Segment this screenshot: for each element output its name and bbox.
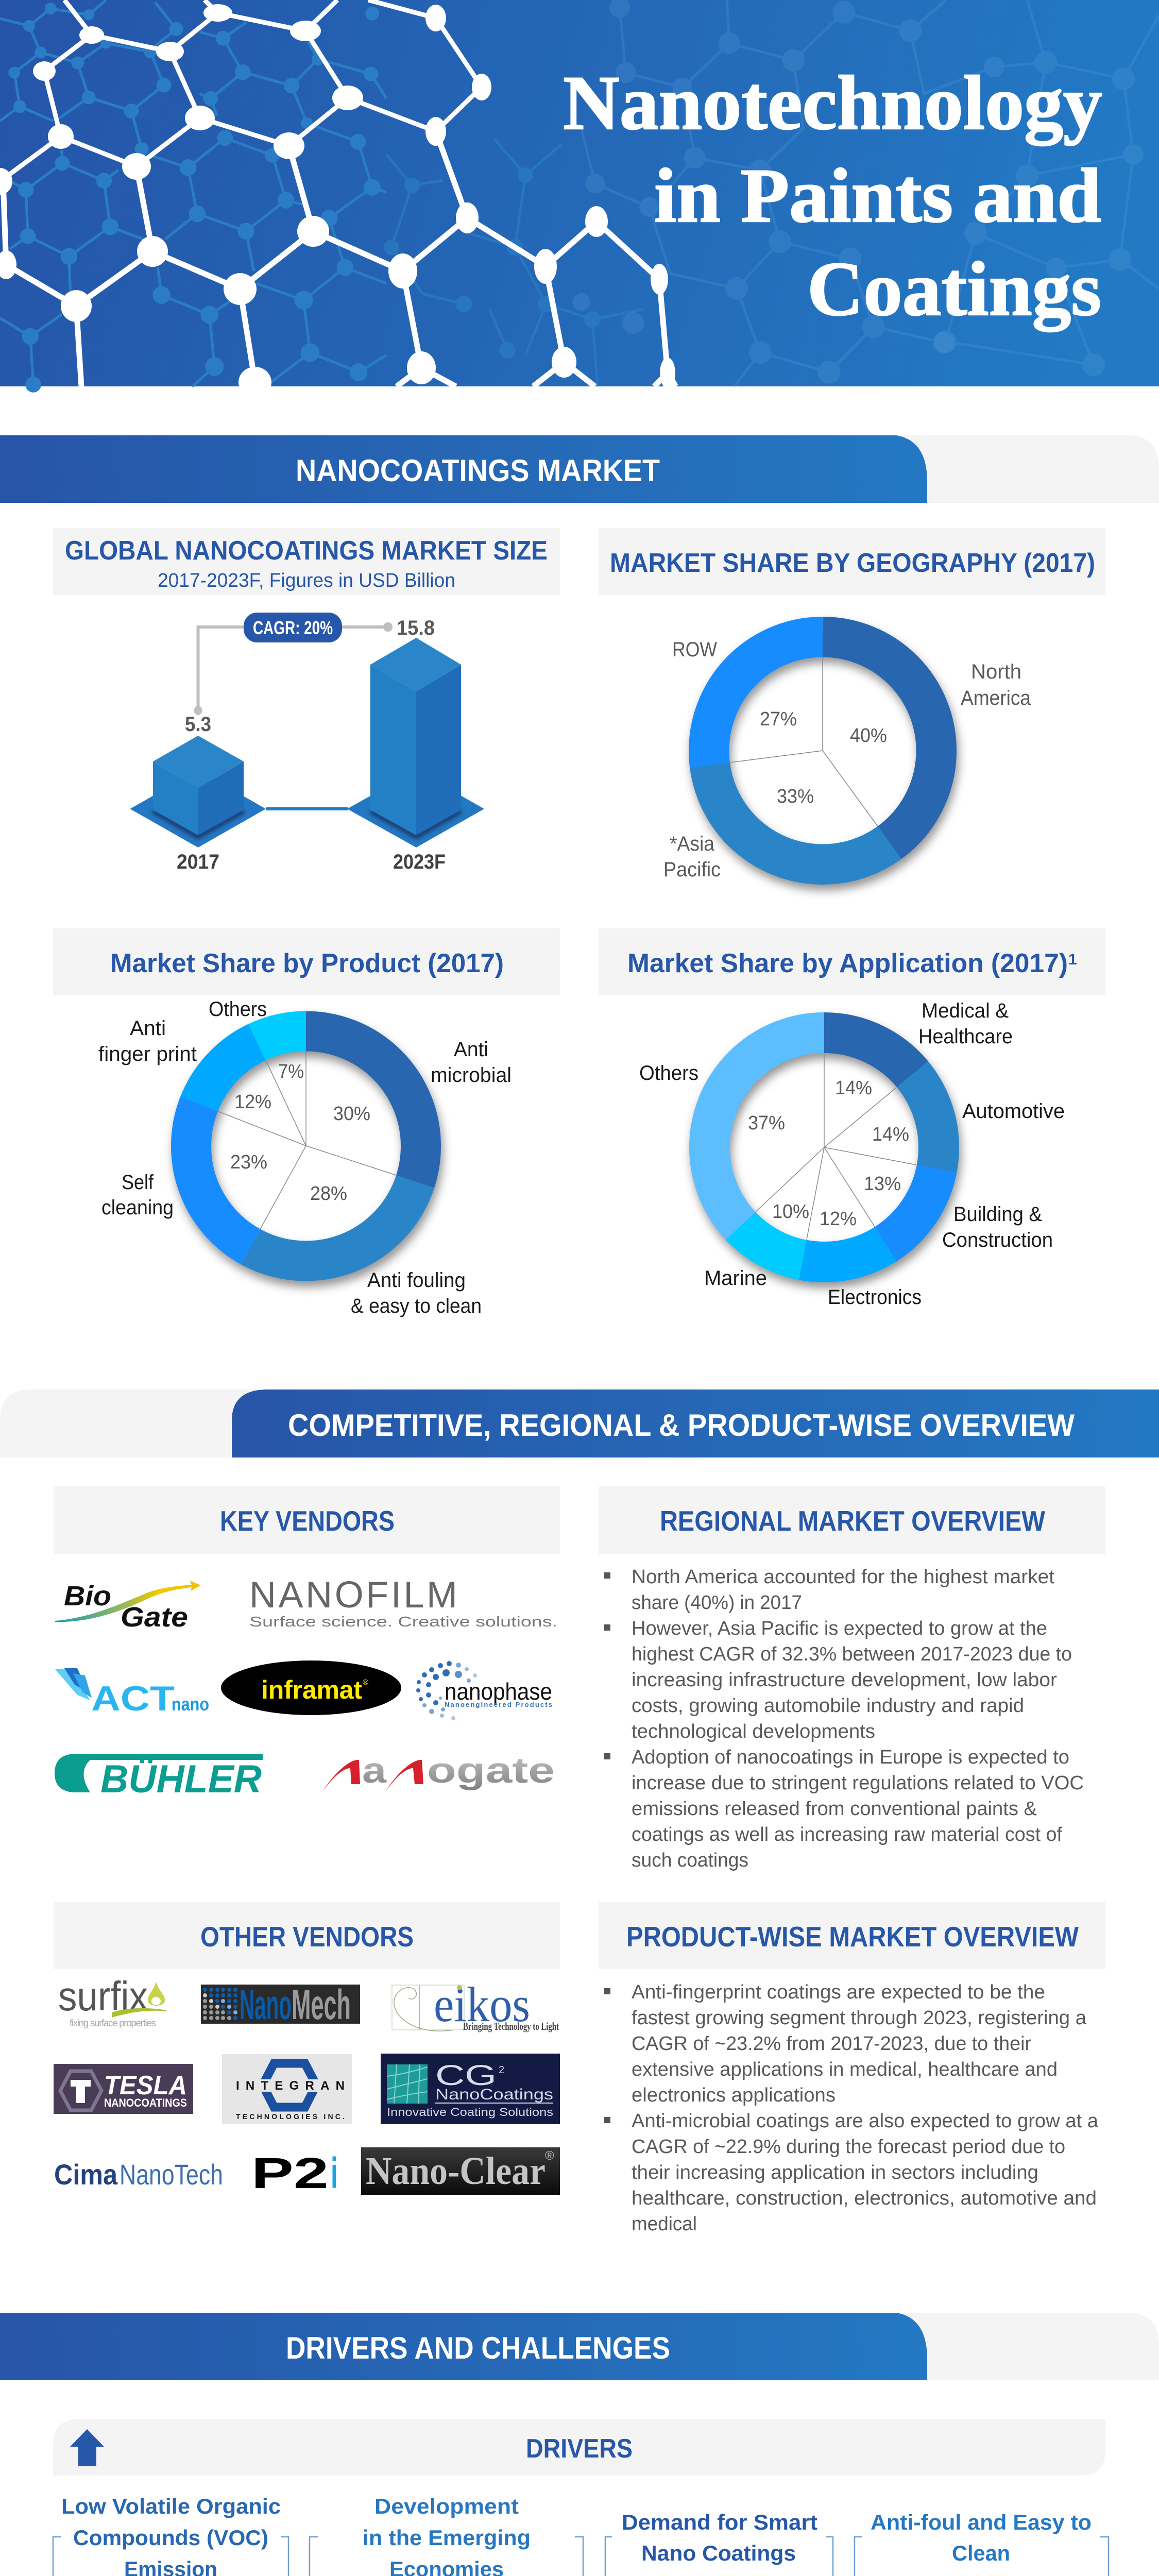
donut chart: product: & easy to clean — [351, 1295, 482, 1317]
logo: nanogate: a — [362, 1750, 387, 1790]
donut chart: application: Marine — [704, 1267, 767, 1290]
driver card: emerging economies — [310, 2494, 583, 2576]
title — [563, 60, 1102, 332]
driver card: smart nano coatings: Nano Coatings — [641, 2541, 796, 2565]
heading: product: Market Share by Product (2017) — [110, 948, 504, 978]
logo: inframat: ® — [363, 1678, 368, 1687]
donut chart: application: Healthcare — [918, 1025, 1013, 1048]
heading: regional: REGIONAL MARKET OVERVIEW — [660, 1505, 1045, 1537]
panel: market share by product — [53, 928, 560, 1317]
bullet list: product-wise: electronics applications — [632, 2084, 836, 2106]
bullet list: regional: highest CAGR of 32.3% between 2017-2023 due to — [632, 1643, 1072, 1665]
donut chart: product — [98, 998, 512, 1317]
panel: key vendors — [54, 1486, 560, 1801]
bar 2023F: 2023F — [393, 851, 446, 873]
logo: nanophase: Nanoengineered Products — [445, 1701, 552, 1708]
donut chart: product: 12% — [234, 1091, 271, 1113]
heading: product-wise: PRODUCT-WISE MARKET OVERVIEW — [626, 1921, 1079, 1953]
donut chart: geography: 27% — [760, 708, 797, 730]
heading: other vendors: OTHER VENDORS — [200, 1921, 414, 1953]
bullet list: product-wise: healthcare, construction, electronics, automotive and — [632, 2188, 1097, 2209]
logo: inframat — [221, 1660, 401, 1715]
panel: product-wise market overview — [599, 1902, 1105, 2235]
bullet list: regional: technological developments — [632, 1721, 875, 1742]
donut chart: product: Anti — [454, 1038, 488, 1061]
logo: Integran: INTEGRAN — [236, 2079, 345, 2093]
driver card: anti-foul and easy to clean: Anti-foul and Easy to — [871, 2510, 1092, 2534]
donut chart: geography: 40% — [850, 725, 887, 747]
driver card: VOC emission: Low Volatile Organic — [61, 2494, 281, 2518]
bullet list: product-wise — [604, 1981, 1099, 2235]
logo: Bio Gate: Gate — [121, 1602, 188, 1633]
header banner — [0, 0, 1159, 398]
logo: NanoMech — [201, 1981, 360, 2028]
bar 2017: 2017 — [177, 851, 219, 873]
heading: geography: MARKET SHARE BY GEOGRAPHY (2017) — [610, 548, 1095, 578]
drivers header: DRIVERS — [526, 2434, 633, 2464]
driver card: emerging economies: Development — [374, 2494, 519, 2518]
logo: Buhler: BÜHLER — [100, 1757, 262, 1801]
heading: geography — [599, 528, 1105, 595]
logo: Tesla Nanocoatings: NANOCOATINGS — [104, 2096, 187, 2109]
driver card: VOC emission: Compounds (VOC) — [73, 2526, 268, 2550]
donut chart: product: microbial — [431, 1064, 512, 1087]
logo: ACT nano: ACT — [91, 1679, 175, 1718]
bar 2023F: 15.8 — [397, 617, 435, 639]
donut chart: geography: North — [971, 660, 1021, 683]
bullet list: product-wise: CAGR of ~23.2% from 2017-2023, due to their — [632, 2033, 1031, 2055]
logo: P2i: i — [331, 2149, 338, 2197]
driver card: smart nano coatings: Demand for Smart — [622, 2510, 817, 2534]
driver card: anti-foul and easy to clean: Clean — [952, 2541, 1010, 2565]
heading: product-wise — [599, 1902, 1105, 1969]
donut chart: product: 23% — [230, 1151, 267, 1173]
bullet list: regional: Adoption of nanocoatings in Europe is expected to — [632, 1747, 1069, 1768]
donut chart: geography: America — [961, 687, 1031, 709]
icon: up arrow — [70, 2429, 104, 2466]
donut chart: application: Construction — [942, 1229, 1053, 1251]
logo: P2i: P2 — [251, 2149, 329, 2197]
logo: nanogate — [323, 1750, 555, 1791]
heading: market size: 2017-2023F, Figures in USD Billion — [158, 570, 455, 591]
donut chart: product: Self — [122, 1171, 154, 1194]
logo: Bio Gate: Bio — [64, 1581, 111, 1612]
donut chart: application: 13% — [864, 1173, 901, 1195]
donut chart: product: Others — [209, 998, 267, 1021]
donut chart: application: 14% — [872, 1124, 909, 1145]
bullet list: regional: emissions released from conventional paints & — [632, 1798, 1037, 1820]
panel: global nanocoatings market size — [53, 528, 560, 873]
logo: CG2 Nanocoatings: NanoCoatings — [435, 2086, 553, 2103]
logo: Nanofilm: Surface science. Creative solutions. — [249, 1614, 557, 1630]
logo: NanoMech: Nano — [240, 1981, 292, 2028]
donut chart: geography: 33% — [777, 786, 814, 807]
panel: market share by geography — [599, 528, 1105, 881]
bullet list: product-wise: CAGR of ~22.9% during the forecast period due to — [632, 2136, 1065, 2158]
bullet list: regional: increasing infrastructure development, low labor — [632, 1669, 1057, 1691]
donut chart: application: Building & — [953, 1203, 1042, 1226]
logo: Tesla Nanocoatings: TESLA — [104, 2071, 187, 2100]
title: in Paints and — [654, 153, 1101, 239]
bullet list: regional: costs, growing automobile industry and rapid — [632, 1695, 1024, 1717]
heading: application: Market Share by Application (2017) — [627, 948, 1068, 978]
logo: nanogate: ogate — [427, 1750, 555, 1790]
heading: key vendors — [54, 1486, 560, 1554]
donut chart: application: 12% — [820, 1208, 857, 1230]
bullet list: regional: increase due to stringent regulations related to VOC — [632, 1772, 1084, 1794]
logo: Integran — [222, 2054, 352, 2124]
section bar: nanocoatings market — [0, 435, 1159, 503]
CAGR connector — [194, 613, 393, 715]
donut chart: product: finger print — [98, 1043, 197, 1065]
logo: ACT nano: nano — [172, 1693, 209, 1715]
donut chart: geography: Pacific — [663, 858, 721, 881]
logo: Tesla Nanocoatings — [54, 2064, 193, 2114]
bullet list: regional: However, Asia Pacific is expected to grow at the — [632, 1618, 1047, 1639]
logo: Cima NanoTech — [54, 2158, 223, 2191]
logo: eikos: eikos — [434, 1977, 530, 2032]
logo: Integran: TECHNOLOGIES INC. — [236, 2112, 345, 2121]
logo: CG2 Nanocoatings: 2 — [499, 2064, 504, 2076]
donut chart: product: cleaning — [101, 1196, 174, 1219]
bullet list: regional: share (40%) in 2017 — [632, 1592, 802, 1614]
logo: surfix: fixing surface properties — [70, 2018, 156, 2029]
heading: market size — [53, 528, 560, 595]
donut chart: application: Electronics — [828, 1286, 922, 1309]
logo: Cima NanoTech: Cima — [54, 2158, 118, 2191]
bullet list: regional — [604, 1566, 1084, 1871]
section bar: competitive overview — [0, 1389, 1159, 1458]
bullet list: regional: such coatings — [632, 1850, 748, 1871]
driver card: anti-foul and easy to clean — [855, 2510, 1109, 2576]
panel: market share by application — [599, 928, 1105, 1309]
logo: Bio Gate — [55, 1581, 201, 1633]
logo: CG2 Nanocoatings — [381, 2054, 560, 2124]
logo: Nano-Clear: Nano-Clear — [366, 2149, 546, 2193]
logo: eikos — [392, 1977, 559, 2032]
donut chart: application: 37% — [748, 1112, 785, 1134]
heading: other vendors — [54, 1902, 560, 1969]
faint background molecular network, continuing centre — [384, 139, 644, 386]
heading: product — [53, 928, 560, 995]
donut chart: application: Others — [639, 1062, 698, 1084]
bullet list: product-wise: their increasing application in sectors including — [632, 2162, 1038, 2183]
donut chart: product: 30% — [333, 1103, 370, 1125]
panel: drivers — [53, 2419, 1109, 2576]
bullet list: product-wise: Anti-microbial coatings are also expected to grow at a — [632, 2110, 1099, 2132]
white molecular network — [0, 0, 676, 398]
logo: Nano-Clear: ® — [545, 2149, 554, 2163]
donut chart: application — [639, 999, 1065, 1309]
logo: CG2 Nanocoatings: Innovative Coating Solutions — [387, 2106, 553, 2119]
donut chart: application: 14% — [835, 1077, 872, 1099]
logo: Cima NanoTech: NanoTech — [120, 2158, 223, 2191]
logo: NanoMech: Mech — [292, 1981, 351, 2028]
driver card: VOC emission — [53, 2494, 288, 2576]
logo: ACT nano — [55, 1668, 209, 1718]
bullet list: product-wise: medical — [632, 2213, 697, 2235]
donut chart: application: 10% — [772, 1201, 809, 1223]
heading: application — [599, 928, 1105, 995]
heading: market size: GLOBAL NANOCOATINGS MARKET SIZE — [65, 536, 548, 566]
donut chart: geography: *Asia — [670, 833, 715, 855]
faint background molecular network, right — [572, 0, 955, 386]
bar 2023F — [266, 617, 484, 873]
bullet list: product-wise: fastest growing segment through 2023, registering a — [632, 2007, 1087, 2029]
section bar: drivers and challenges: DRIVERS AND CHALLENGES — [286, 2331, 670, 2365]
heading: key vendors: KEY VENDORS — [220, 1505, 395, 1537]
logo: Nanofilm — [249, 1574, 557, 1630]
driver card: smart nano coatings — [605, 2510, 833, 2576]
donut chart: product: 7% — [278, 1061, 304, 1082]
logo: Nanofilm: NANOFILM — [249, 1574, 457, 1616]
title: Nanotechnology — [563, 60, 1102, 146]
logo: nanophase: nanophase — [445, 1678, 552, 1705]
donut chart: product: Anti — [130, 1017, 166, 1040]
donut chart: product: Anti fouling — [367, 1269, 466, 1292]
section bar: nanocoatings market: NANOCOATINGS MARKET — [296, 453, 660, 488]
logo: nanophase — [416, 1661, 552, 1720]
panel: regional market overview — [599, 1486, 1105, 1871]
logo: surfix: surfix — [58, 1973, 148, 2019]
drivers header — [53, 2419, 1105, 2476]
bullet list: regional: coatings as well as increasing raw material cost of — [632, 1824, 1062, 1845]
donut chart: application: Automotive — [962, 1100, 1065, 1123]
logo: eikos: Bringing Technology to Light — [463, 2020, 559, 2032]
heading: regional — [599, 1486, 1105, 1554]
section bar: competitive overview: COMPETITIVE, REGIONAL & PRODUCT-WISE OVERVIEW — [288, 1408, 1075, 1443]
donut chart: product: 28% — [310, 1183, 347, 1205]
bullet list: product-wise: extensive applications in medical, healthcare and — [632, 2059, 1058, 2080]
driver card: emerging economies: in the Emerging — [363, 2526, 531, 2550]
donut chart: geography: ROW — [672, 638, 717, 661]
faint background molecular network, left — [0, 0, 386, 393]
bullet list: product-wise: Anti-fingerprint coatings are expected to be the — [632, 1981, 1045, 2003]
donut chart: geography — [663, 637, 1031, 881]
panel: other vendors — [54, 1902, 560, 2197]
bullet list: regional: North America accounted for the highest market — [632, 1566, 1054, 1588]
bar 2017 — [130, 713, 266, 873]
logo: P2i — [251, 2149, 338, 2197]
bar 2017: 5.3 — [185, 713, 211, 736]
title: Coatings — [807, 246, 1101, 332]
CAGR connector: CAGR: 20% — [253, 617, 333, 638]
heading: application: 1 — [1068, 951, 1077, 968]
section bar: drivers and challenges — [0, 2313, 1159, 2380]
logo: CG2 Nanocoatings: CG — [435, 2059, 497, 2091]
donut chart: application: Medical & — [922, 999, 1009, 1022]
logo: inframat: inframat — [261, 1675, 362, 1704]
